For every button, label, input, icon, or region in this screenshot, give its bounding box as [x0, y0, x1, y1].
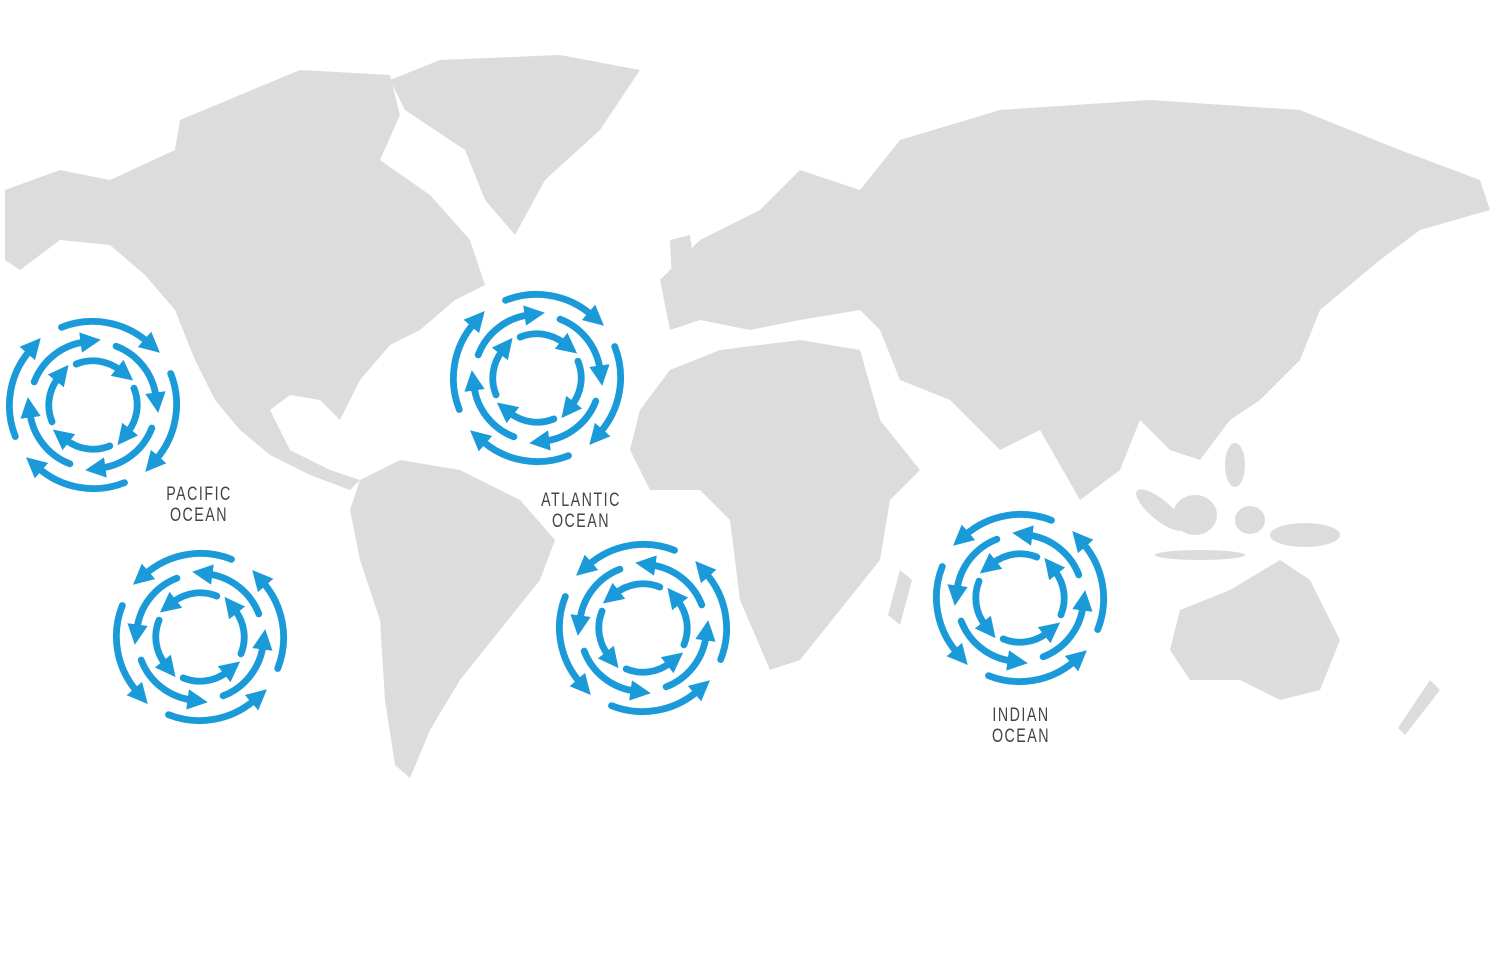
- gyre: indian ocean: [936, 514, 1104, 682]
- Indonesia: [1131, 443, 1340, 560]
- New Zealand: [1398, 680, 1440, 735]
- label: indian ocean: OCEAN: [992, 725, 1050, 747]
- North America: [5, 70, 485, 490]
- label: pacific ocean: OCEAN: [170, 504, 228, 526]
- Japan: [1270, 280, 1310, 360]
- label: atlantic ocean: ATLANTIC: [541, 489, 621, 511]
- South America: [350, 460, 555, 778]
- gyre: north pacific: [9, 321, 177, 489]
- label: atlantic ocean: OCEAN: [552, 510, 610, 532]
- Australia: [1170, 560, 1340, 700]
- Greenland: [390, 55, 640, 235]
- label: pacific ocean: PACIFIC: [166, 483, 232, 505]
- gyre: north atlantic: [453, 294, 621, 462]
- Eurasia: [660, 100, 1490, 500]
- Africa: [630, 340, 920, 670]
- world map: [5, 55, 1490, 778]
- gyre: south pacific: [116, 553, 284, 721]
- gyre: south atlantic: [559, 544, 727, 712]
- Madagascar: [888, 570, 912, 625]
- label: indian ocean: INDIAN: [992, 704, 1050, 726]
- UK: [670, 235, 695, 280]
